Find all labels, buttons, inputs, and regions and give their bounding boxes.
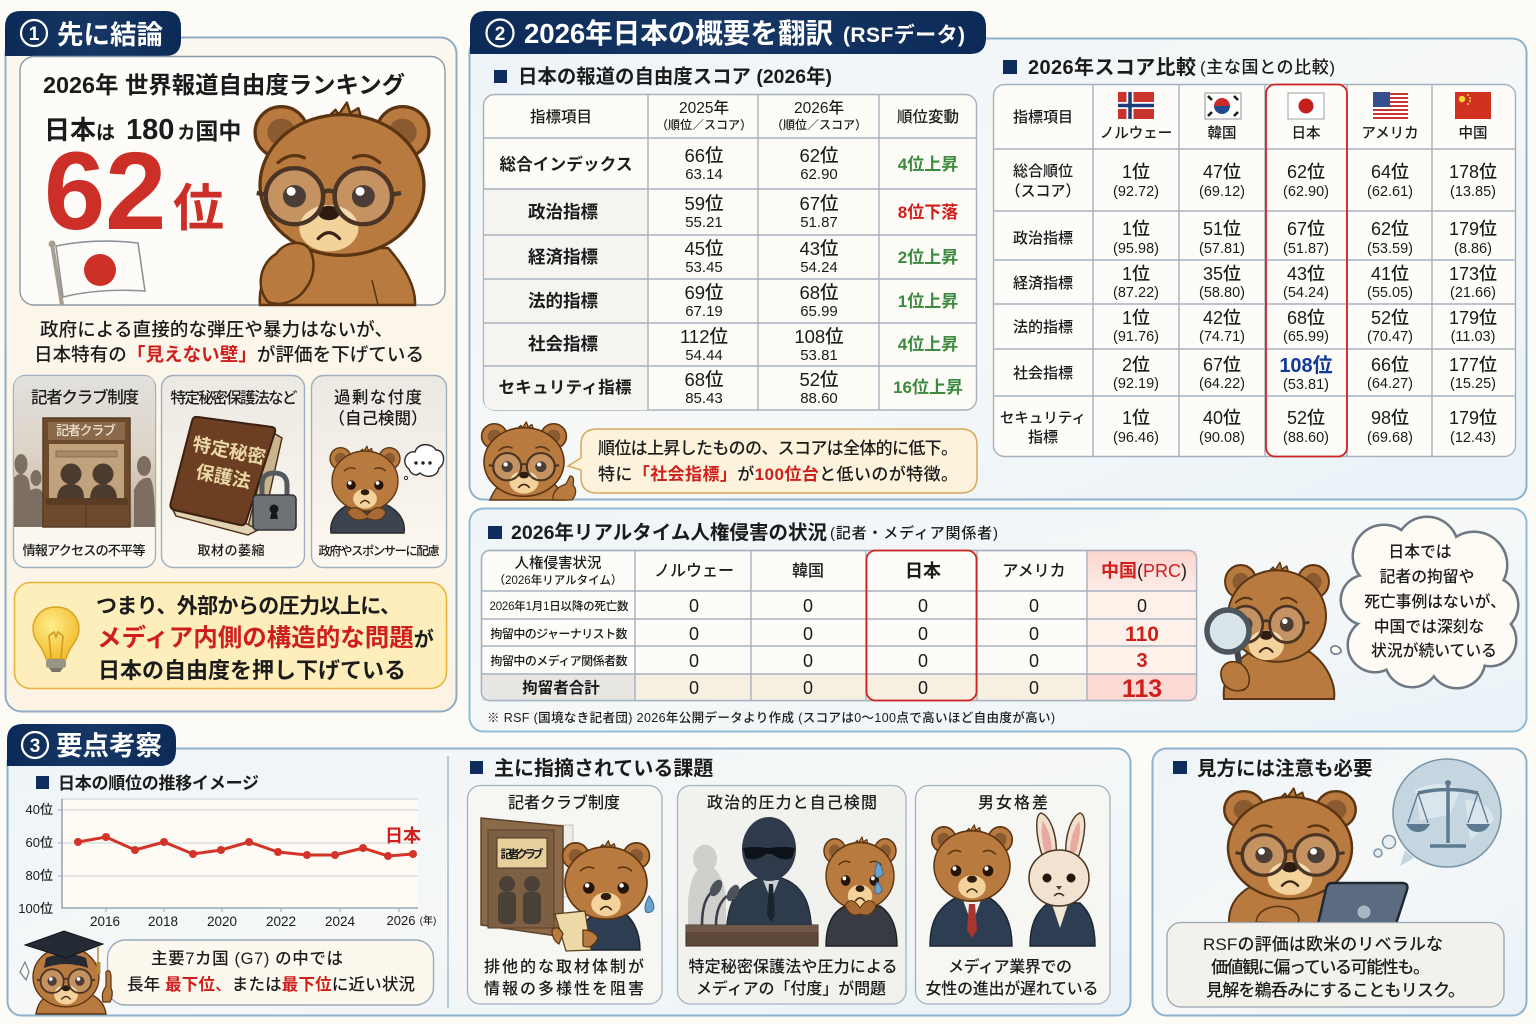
row: overall rank xyxy=(1005,162,1497,200)
thought cloud: 死亡事例はないが、 xyxy=(1364,592,1506,611)
tab heading: section 2 xyxy=(470,11,986,54)
card: political pressure: 特定秘密保護法や圧力による xyxy=(688,958,898,976)
card: self-censorship: 政府やスポンサーに配慮 xyxy=(318,543,440,558)
table header xyxy=(494,555,1187,587)
row: security: 40位 xyxy=(1203,408,1241,428)
table header xyxy=(530,99,959,132)
row: overall rank: (69.12) xyxy=(1199,184,1245,200)
row: security: 指標 xyxy=(1028,429,1058,446)
highlight: Japan column xyxy=(1266,84,1347,456)
table: country comparison xyxy=(994,84,1516,456)
row: political: 政治指標 xyxy=(528,202,598,222)
card: self-censorship: （自己検閲） xyxy=(328,409,428,428)
icon: magnifier bear xyxy=(1207,562,1334,699)
row: detained journalists: 拘留中のジャーナリスト数 xyxy=(490,626,628,641)
panel: key takeaways xyxy=(7,724,1130,1016)
row: legal xyxy=(1013,308,1497,345)
flag: Japan xyxy=(1288,93,1324,142)
row: detained journalists: 110 xyxy=(1125,623,1159,646)
row: political: (8.86) xyxy=(1454,241,1492,257)
callout: G7: 主要7カ国 (G7) の中では xyxy=(151,949,343,968)
row: deaths: 0 xyxy=(1029,596,1039,616)
row: security: 52位 xyxy=(799,369,839,390)
row: economic: 経済指標 xyxy=(1013,275,1073,292)
card: press club issue: 記者クラブ制度 xyxy=(508,793,620,812)
row: economic: 43位 xyxy=(799,238,839,259)
card: secrets law: 特定秘密保護法など xyxy=(170,389,298,407)
caption box xyxy=(1167,922,1504,1007)
x axis labels: 2016 xyxy=(90,914,120,929)
row: security: セキュリティ xyxy=(1000,411,1086,427)
caption box: RSFの評価は欧米のリベラルな xyxy=(1203,935,1443,954)
tab heading: section 2: (RSFデータ) xyxy=(843,23,965,47)
table header: ノルウェー xyxy=(654,562,734,580)
row: social: 108位 xyxy=(1279,354,1333,377)
row: security: 98位 xyxy=(1371,408,1409,428)
row: total detained: 113 xyxy=(1122,675,1162,703)
illustration: locked law book xyxy=(170,417,296,535)
row: deaths xyxy=(490,596,1147,616)
row: economic: 2位上昇 xyxy=(898,248,958,267)
card: political pressure: メディアの「付度」が問題 xyxy=(696,979,886,998)
icon: bear with notepad xyxy=(552,841,654,951)
tab heading: section 3: 3 xyxy=(30,736,40,757)
row: deaths: 0 xyxy=(918,596,928,616)
row: economic: 35位 xyxy=(1203,264,1241,284)
row: overall rank: 1位 xyxy=(1122,162,1150,182)
row: economic: 53.45 xyxy=(685,259,723,276)
row: security: 52位 xyxy=(1287,408,1325,428)
row: security: (88.60) xyxy=(1283,430,1329,446)
heading: realtime violations: (記者・メディア関係者) xyxy=(830,524,998,542)
icon: rabbit in suit xyxy=(1029,813,1095,946)
illustration: closed door xyxy=(481,818,573,937)
table: violations xyxy=(482,550,1197,703)
flag: Japan: 日本 xyxy=(1292,125,1321,142)
row: deaths: 0 xyxy=(689,596,699,616)
row: detained media workers: 拘留中のメディア関係者数 xyxy=(490,653,628,668)
row: overall rank: 62位 xyxy=(1287,162,1325,182)
row: security: 68位 xyxy=(684,369,724,390)
icon: light bulb xyxy=(33,607,79,672)
row: overall rank: (62.90) xyxy=(1283,184,1329,200)
row: political: 51.87 xyxy=(800,214,838,231)
caption box: 価値観に偏っている可能性も。 xyxy=(1211,958,1430,977)
row: detained journalists: 0 xyxy=(918,624,928,644)
y axis labels: 60位 xyxy=(26,835,53,850)
row: political: (95.98) xyxy=(1113,241,1159,257)
row: detained media workers xyxy=(490,650,1148,672)
thought cloud: 中国では深刻な xyxy=(1374,618,1484,636)
tab heading: section 2: 2026年日本の概要を翻訳 xyxy=(524,18,833,49)
big rank number: 62 xyxy=(44,130,166,253)
row: overall rank: 178位 xyxy=(1449,162,1497,182)
row: legal: 179位 xyxy=(1449,308,1497,328)
row: overall index: 62.90 xyxy=(800,166,838,183)
row: social: 67位 xyxy=(1203,355,1241,375)
row: political: 1位 xyxy=(1122,219,1150,239)
card: gender gap: 女性の進出が遅れている xyxy=(926,979,1098,998)
row: social: (64.22) xyxy=(1199,376,1245,392)
highlight: Japan column xyxy=(866,550,976,700)
row: political: 8位下落 xyxy=(898,203,958,222)
row: overall index: 総合インデックス xyxy=(500,154,632,174)
row: detained journalists: 0 xyxy=(689,624,699,644)
card: ranking headline xyxy=(20,56,445,305)
flag: China xyxy=(1455,92,1491,142)
icon: thought bubble xyxy=(404,445,444,480)
row: detained media workers: 0 xyxy=(918,651,928,671)
y axis labels: 80位 xyxy=(26,868,53,883)
ranking title: 2026年 世界報道自由度ランキング xyxy=(43,71,405,98)
table header: 順位変動 xyxy=(897,108,959,126)
row: social: 社会指標 xyxy=(1013,365,1073,382)
illustration: locked law book: 特定秘密 xyxy=(191,433,268,468)
thought cloud xyxy=(1331,518,1517,687)
row: legal: (11.03) xyxy=(1451,329,1495,345)
callout: score note xyxy=(568,429,977,493)
row: security: (96.46) xyxy=(1113,430,1159,446)
heading: rank trend: 日本の順位の推移イメージ xyxy=(58,774,259,793)
tab heading: section 1: 1 xyxy=(29,24,40,45)
row: political: 59位 xyxy=(684,193,724,214)
card: political pressure xyxy=(678,786,906,1004)
card: press club issue: 排他的な取材体制が xyxy=(484,957,644,976)
row: political: (57.81) xyxy=(1199,241,1245,257)
table header: （順位／スコア） xyxy=(771,118,867,132)
row: security: (90.08) xyxy=(1199,430,1245,446)
illustration: shadow figure at podium xyxy=(686,817,818,946)
row: legal: (70.47) xyxy=(1367,329,1413,345)
panel: conclusion xyxy=(5,11,456,712)
panel: Japan overview xyxy=(470,11,1526,500)
row: economic: (58.80) xyxy=(1199,285,1245,301)
row: legal: 42位 xyxy=(1203,308,1241,328)
card: gender gap: メディア業界での xyxy=(948,957,1072,976)
panel: human rights violations xyxy=(470,508,1526,732)
card: press club system xyxy=(14,376,156,568)
text: invisible wall summary xyxy=(34,319,424,365)
row: social xyxy=(528,326,958,364)
card: gender gap: 男女格差 xyxy=(978,794,1048,812)
row: social: 177位 xyxy=(1449,355,1497,375)
row: overall rank: 64位 xyxy=(1371,162,1409,182)
text: invisible wall summary: 日本特有の「見えない壁」が評価を下げている xyxy=(34,344,424,365)
illustration: press club booth: 記者クラブ xyxy=(56,423,116,438)
callout: structural problem: 日本の自由度を押し下げている xyxy=(98,658,406,683)
tab heading: section 1: 先に結論 xyxy=(57,20,163,50)
heading: Japan scores: 日本の報道の自由度スコア (2026年) xyxy=(518,65,832,88)
row: political: 67位 xyxy=(799,193,839,214)
icon: Japanese flag xyxy=(48,240,145,305)
row: political: (53.59) xyxy=(1367,241,1413,257)
row: detained media workers: 0 xyxy=(1029,651,1039,671)
table header: アメリカ xyxy=(1002,562,1066,580)
row: overall rank: (13.85) xyxy=(1450,184,1496,200)
row: political: 62位 xyxy=(1371,219,1409,239)
x axis labels: (年) xyxy=(420,914,436,927)
card: gender gap xyxy=(916,786,1110,1004)
row: legal: 69位 xyxy=(684,282,724,303)
row: deaths: 0 xyxy=(803,596,813,616)
row: detained journalists: 0 xyxy=(1029,624,1039,644)
card: self-censorship xyxy=(312,376,446,568)
row: overall rank: (62.61) xyxy=(1367,184,1413,200)
heading: caution: 見方には注意も必要 xyxy=(1197,757,1373,780)
row: legal xyxy=(528,282,958,320)
row: economic: 173位 xyxy=(1449,264,1497,284)
row: social: (92.19) xyxy=(1113,376,1159,392)
row: total detained: 0 xyxy=(689,678,699,698)
row: legal: 52位 xyxy=(1371,308,1409,328)
row: overall index: 66位 xyxy=(684,145,724,166)
row: legal: 68位 xyxy=(1287,308,1325,328)
row: social: 53.81 xyxy=(800,347,838,364)
row: total detained: 0 xyxy=(918,678,928,698)
tab heading: section 2: 2 xyxy=(495,24,505,45)
footnote: ※ RSF (国境なき記者団) 2026年公開データより作成 (スコアは0〜100点で高いほど自由度が高い) xyxy=(487,710,1055,725)
flag: Norway xyxy=(1100,92,1172,142)
thought cloud: 記者の拘留や xyxy=(1380,568,1474,586)
row: political: 51位 xyxy=(1203,219,1241,239)
row: legal: 68位 xyxy=(799,282,839,303)
row: social: (64.27) xyxy=(1367,376,1413,392)
heading: realtime violations: 2026年リアルタイム人権侵害の状況 xyxy=(511,521,827,544)
row: legal: 法的指標 xyxy=(528,291,598,311)
row: legal: 1位 xyxy=(1122,308,1150,328)
row: political: 179位 xyxy=(1449,219,1497,239)
row: legal: (65.99) xyxy=(1283,329,1329,345)
table header: 人権侵害状況 xyxy=(514,555,602,572)
row: overall index: 62位 xyxy=(799,145,839,166)
flag: USA: アメリカ xyxy=(1361,125,1419,142)
table header: 韓国 xyxy=(792,562,824,580)
row: economic: 1位 xyxy=(1122,264,1150,284)
x axis labels: 2018 xyxy=(148,914,178,929)
row: overall index: 63.14 xyxy=(685,166,723,183)
row: detained media workers: 0 xyxy=(803,651,813,671)
row: social xyxy=(1013,354,1497,393)
rank line xyxy=(74,833,417,860)
thought cloud: 日本では xyxy=(1388,543,1452,561)
table header: 中国(PRC) xyxy=(1101,561,1187,581)
row: legal: (91.76) xyxy=(1113,329,1159,345)
icon: worried bear in suit xyxy=(330,446,404,533)
row: security: 85.43 xyxy=(685,390,723,407)
y axis labels xyxy=(18,802,53,916)
row: detained media workers: 0 xyxy=(689,651,699,671)
callout: structural problem: つまり、外部からの圧力以上に、 xyxy=(96,595,401,618)
row: political xyxy=(528,193,958,231)
row: overall rank: 47位 xyxy=(1203,162,1241,182)
y axis labels: 100位 xyxy=(18,901,53,916)
icon: bear in suit xyxy=(930,825,1012,946)
row: detained journalists: 0 xyxy=(803,624,813,644)
heading: score comparison xyxy=(1003,56,1335,79)
row: security xyxy=(1000,408,1497,446)
row: political: 67位 xyxy=(1287,219,1325,239)
row: social: 54.44 xyxy=(685,347,723,364)
heading: score comparison: 2026年スコア比較 xyxy=(1028,56,1196,79)
illustration: closed door: 記者クラブ xyxy=(500,847,544,861)
row: economic: 経済指標 xyxy=(528,247,598,267)
line chart: Japan rank trend xyxy=(18,799,436,929)
row: social: 112位 xyxy=(680,326,728,347)
row: legal: 法的指標 xyxy=(1013,319,1073,336)
callout: structural problem: メディア内側の構造的な問題が xyxy=(97,623,434,652)
card: press club system: 情報アクセスの不平等 xyxy=(22,542,146,558)
table header: （2026年リアルタイム） xyxy=(494,573,622,587)
row: economic: 45位 xyxy=(684,238,724,259)
table header: label: 指標項目 xyxy=(1013,109,1073,126)
row: social: (53.81) xyxy=(1283,377,1329,393)
table: Japan press freedom score xyxy=(484,94,976,410)
row: total detained: 0 xyxy=(1029,678,1039,698)
tab heading: section 3 xyxy=(7,724,176,766)
row: security xyxy=(498,369,963,407)
row: economic xyxy=(1013,264,1497,301)
row: legal: 65.99 xyxy=(800,303,838,320)
row: economic: (87.22) xyxy=(1113,285,1159,301)
row: overall rank: (92.72) xyxy=(1113,184,1159,200)
card: press club system: 記者クラブ制度 xyxy=(31,387,139,407)
row: social: (15.25) xyxy=(1450,376,1496,392)
row: security: 88.60 xyxy=(800,390,838,407)
tab heading: section 3: 要点考察 xyxy=(56,731,162,761)
caption box: 見解を鵜呑みにすることもリスク。 xyxy=(1206,981,1465,1000)
rank unit: 位 xyxy=(173,180,224,237)
row: detained media workers: 3 xyxy=(1136,650,1148,672)
callout: score note: 特に「社会指標」が100位台と低いのが特徴。 xyxy=(598,464,958,484)
row: security: 1位 xyxy=(1122,408,1150,428)
card: press club issue: 情報の多様性を阻害 xyxy=(484,980,644,998)
row: detained journalists xyxy=(490,623,1159,646)
x axis labels: 2022 xyxy=(266,914,296,929)
illustration: press club booth xyxy=(14,418,155,527)
icon: crying bear xyxy=(824,837,897,946)
table header: 指標項目 xyxy=(530,108,592,126)
Japan out of 180: 日本は 180カ国中 xyxy=(44,114,241,146)
table header: 日本 xyxy=(905,561,941,581)
callout: score note: 順位は上昇したものの、スコアは全体的に低下。 xyxy=(598,439,958,458)
row: social: 社会指標 xyxy=(528,334,598,354)
table header: （順位／スコア） xyxy=(656,118,752,132)
card: secrets law xyxy=(162,376,304,568)
row: legal: 67.19 xyxy=(685,303,723,320)
row: security: 179位 xyxy=(1449,408,1497,428)
icon: bear with laptop xyxy=(1224,788,1407,924)
row: social: 66位 xyxy=(1371,355,1409,375)
card: press club issue xyxy=(468,786,662,1004)
row: overall index xyxy=(500,145,958,183)
row: political: 政治指標 xyxy=(1013,230,1073,247)
row: overall index: 4位上昇 xyxy=(898,155,958,174)
heading: score comparison: (主な国との比較) xyxy=(1200,58,1335,77)
row: political: (51.87) xyxy=(1283,241,1329,257)
card: secrets law: 取材の萎縮 xyxy=(198,543,264,558)
row: economic: 41位 xyxy=(1371,264,1409,284)
icon: pointing bear xyxy=(482,422,576,500)
illustration: locked law book: 保護法 xyxy=(194,461,253,492)
x axis labels: 2026 xyxy=(387,913,415,928)
row: social: 108位 xyxy=(794,326,844,347)
x axis labels: 2024 xyxy=(325,914,356,929)
row: total detained xyxy=(522,675,1162,703)
row: legal: 1位上昇 xyxy=(898,292,958,311)
flag: USA xyxy=(1361,92,1419,142)
row: economic: (54.24) xyxy=(1283,285,1329,301)
row: deaths: 0 xyxy=(1137,596,1147,616)
row: overall rank: 総合順位 xyxy=(1013,163,1073,180)
callout: structural problem xyxy=(14,582,446,688)
row: economic: (21.66) xyxy=(1450,285,1496,301)
row: political: 55.21 xyxy=(685,214,723,231)
icon: thinking bear xyxy=(255,103,429,305)
row: social: 2位 xyxy=(1122,355,1150,375)
tab heading: section 1 xyxy=(5,11,181,56)
text: invisible wall summary: 政府による直接的な弾圧や暴力はないが、 xyxy=(40,319,393,340)
row: economic: 54.24 xyxy=(800,259,838,276)
row: political xyxy=(1013,219,1497,257)
icon: graduate bear xyxy=(20,931,112,1014)
callout: G7 xyxy=(108,940,434,1005)
row: security: (12.43) xyxy=(1450,430,1496,446)
flag: South Korea: 韓国 xyxy=(1208,124,1236,142)
x axis labels xyxy=(90,913,436,929)
series label: 日本 xyxy=(385,826,421,846)
callout: G7: 長年 最下位、または最下位に近い状況 xyxy=(127,975,415,994)
y axis labels: 40位 xyxy=(26,802,53,817)
row: economic: (55.05) xyxy=(1367,285,1413,301)
row: social: 4位上昇 xyxy=(898,335,958,354)
row: deaths: 2026年1月1日以降の死亡数 xyxy=(490,599,629,613)
table header: 2026年 xyxy=(794,99,844,117)
flag: South Korea xyxy=(1205,93,1241,142)
row: economic: 43位 xyxy=(1287,264,1325,284)
flag: Norway: ノルウェー xyxy=(1100,125,1172,142)
x axis labels: 2020 xyxy=(207,914,237,929)
row: security: セキュリティ指標 xyxy=(498,378,632,397)
thought cloud: 状況が続いている xyxy=(1371,641,1497,660)
card: political pressure: 政治的圧力と自己検閲 xyxy=(707,794,877,812)
row: security: (69.68) xyxy=(1367,430,1413,446)
flag: China: 中国 xyxy=(1458,125,1488,142)
card: self-censorship: 過剰な付度 xyxy=(334,388,422,407)
row: overall rank: （スコア） xyxy=(1005,183,1081,200)
row: security: 16位上昇 xyxy=(893,378,963,397)
row: economic xyxy=(528,238,958,276)
icon: thought bubble with scales xyxy=(1374,759,1501,867)
row: total detained: 0 xyxy=(803,678,813,698)
panel: caution xyxy=(1152,748,1526,1016)
row: total detained: 拘留者合計 xyxy=(522,679,600,697)
heading: realtime violations xyxy=(488,521,998,544)
heading: main issues: 主に指摘されている課題 xyxy=(494,757,713,780)
row: legal: (74.71) xyxy=(1199,329,1245,345)
table header: 2025年 xyxy=(679,99,729,117)
